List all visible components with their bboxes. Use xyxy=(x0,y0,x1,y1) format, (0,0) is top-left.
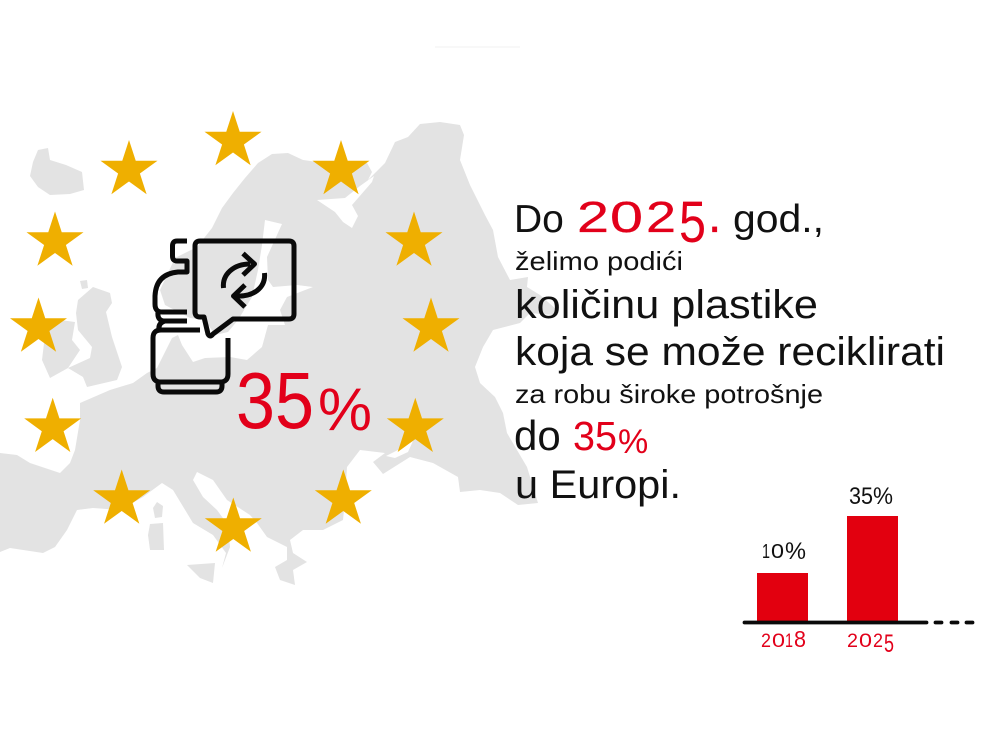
inland seas xyxy=(317,176,413,458)
line: za robu široke potrošnje: za robu široke potrošnje xyxy=(515,379,823,409)
bar: 2018 xyxy=(757,573,808,622)
value label: 35%: % xyxy=(873,483,893,510)
line: do 35%: 35 xyxy=(573,413,617,459)
big figure: 35%: 35 xyxy=(236,356,314,445)
line: želimo podići: želimo podići xyxy=(515,246,683,276)
Sicily xyxy=(187,563,215,583)
ring of twelve stars xyxy=(10,111,460,552)
icon: speech bubble xyxy=(195,241,294,336)
Ireland xyxy=(42,320,80,378)
year label: 2018: 1 xyxy=(785,631,793,652)
year label: 2018: 2 xyxy=(761,631,771,652)
year label: 2018: 8 xyxy=(794,626,806,652)
map of Europe xyxy=(0,122,557,585)
line: Do 2025. god.,: god., xyxy=(733,198,824,241)
headline text block xyxy=(514,190,945,507)
line: Do 2025. god.,: 5 xyxy=(679,190,706,255)
value label: 10%: 1 xyxy=(762,541,770,563)
bar: 2025 xyxy=(847,516,898,622)
year label: 2018: 0 xyxy=(772,631,785,652)
value label: 10%: 0 xyxy=(771,541,784,563)
year label: 2025: 5 xyxy=(884,630,894,658)
icon: bottle with recycling speech bubble xyxy=(153,241,294,392)
line: Do 2025. god.,: . xyxy=(708,190,735,243)
line: koja se može reciklirati: koja se može reciklirati xyxy=(515,330,945,374)
value label: 35%: 35 xyxy=(849,483,873,510)
icon: recycling arrows xyxy=(223,254,265,307)
mainland Europe xyxy=(0,122,557,585)
Iceland xyxy=(30,148,84,195)
line: Do 2025. god.,: Do xyxy=(514,198,575,241)
axis line xyxy=(744,621,972,624)
year label: 2025: 2 xyxy=(847,631,858,652)
big figure: 35%: % xyxy=(318,376,372,443)
Corsica xyxy=(153,502,163,518)
value label: 10%: % xyxy=(785,538,806,565)
line: količinu plastike: količinu plastike xyxy=(515,283,818,327)
line: u Europi.: u Europi. xyxy=(515,463,681,507)
Sardinia xyxy=(148,523,164,550)
line: do 35%: % xyxy=(618,423,648,461)
bar chart: 2018 vs 2025 xyxy=(744,483,972,658)
line: do 35%: do xyxy=(514,412,572,459)
Great Britain xyxy=(68,287,122,387)
line: Do 2025. god.,: 0 xyxy=(610,193,643,242)
line: Do 2025. god.,: 2 xyxy=(646,193,676,242)
icon: bottle xyxy=(153,241,228,392)
year label: 2025: 2 xyxy=(873,631,883,652)
Shetland xyxy=(80,280,88,289)
line: Do 2025. god.,: 2 xyxy=(577,193,609,242)
year label: 2025: 0 xyxy=(859,631,872,652)
